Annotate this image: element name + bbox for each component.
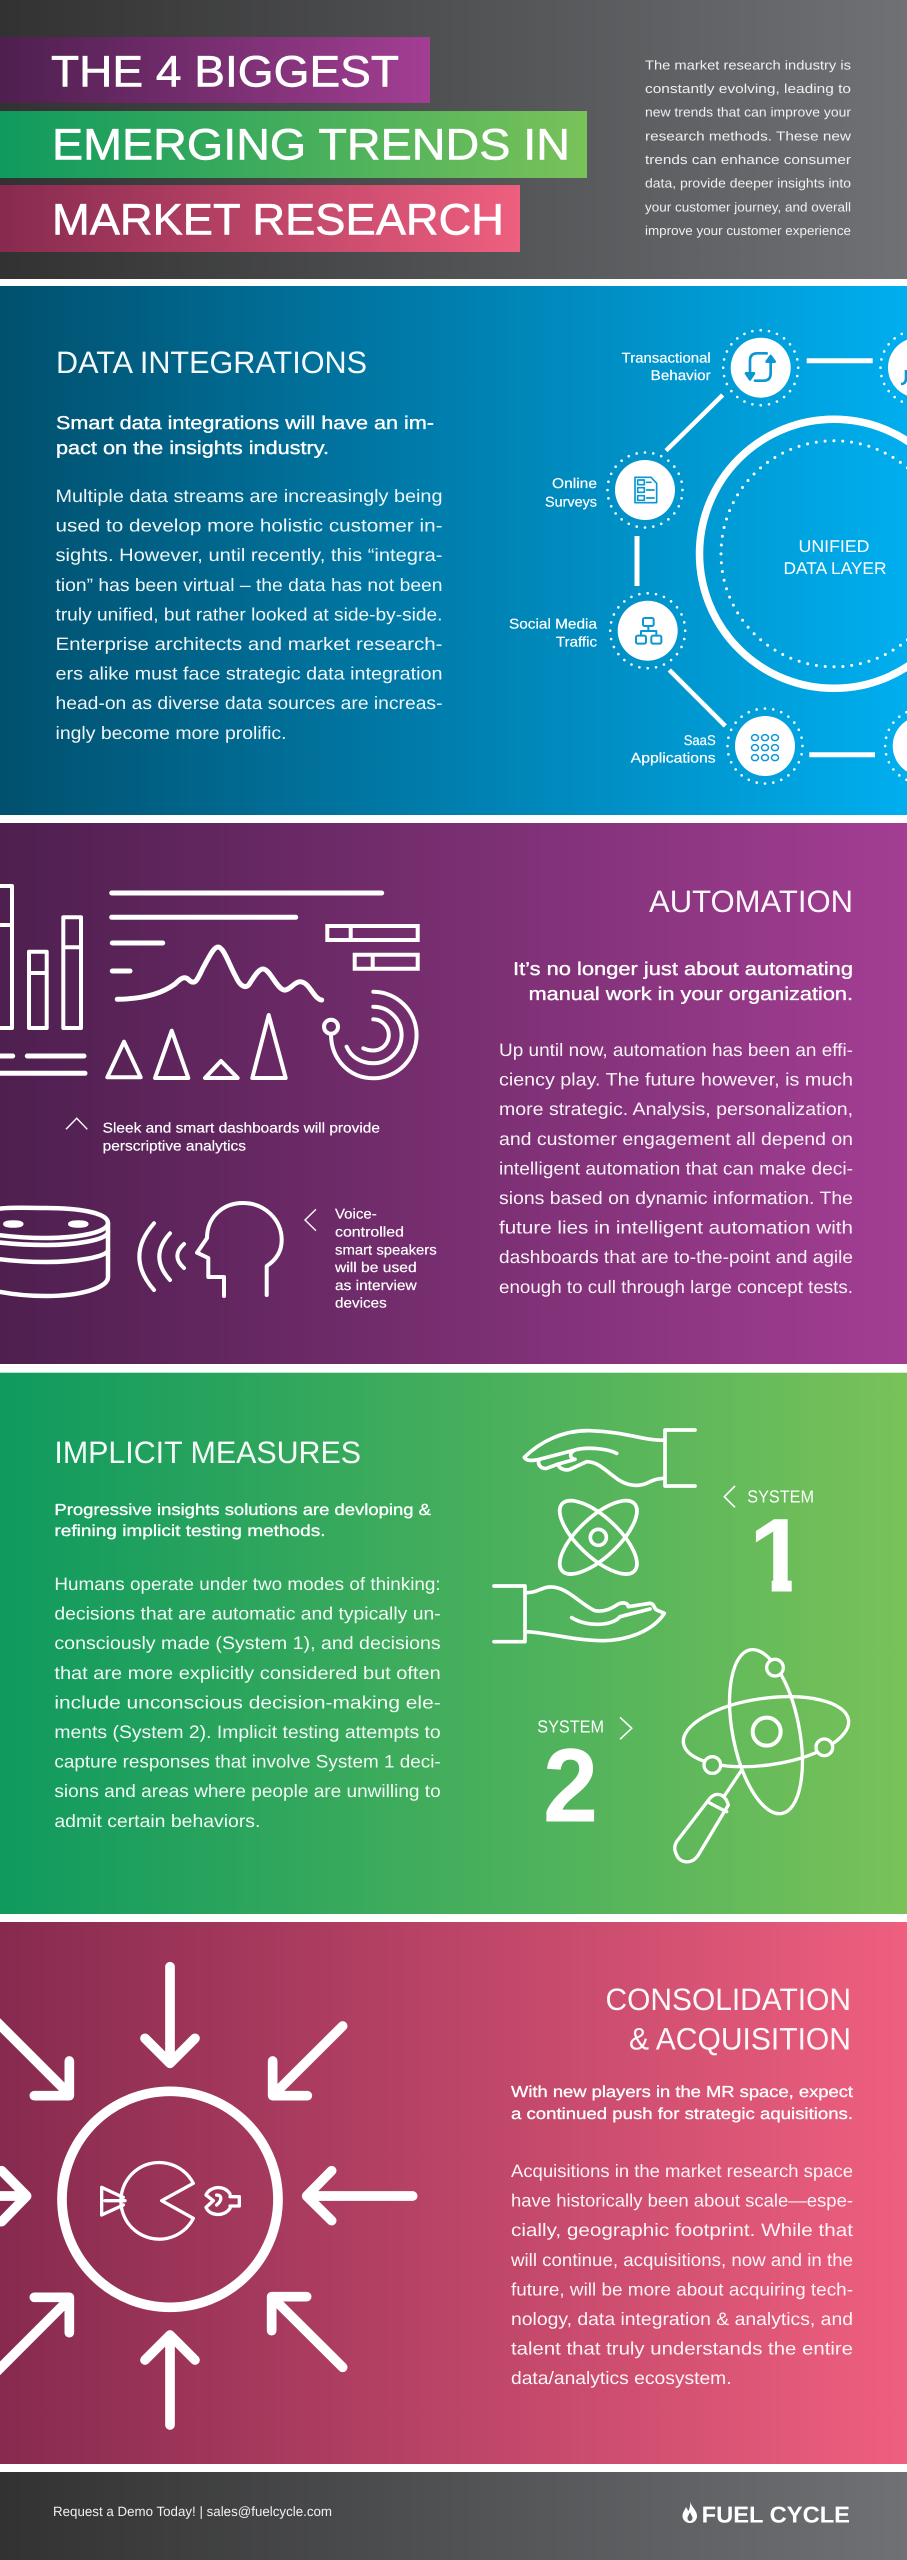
body text: consolidation: talent that truly understands the entire [511,2339,853,2359]
node: saas applications [631,708,802,784]
central circle: UNIFIED [798,537,870,556]
node: social media traffic: Traffic [556,634,597,650]
label: system 1: 1 [749,1498,807,1615]
body text: consolidation: data/analytics ecosystem. [511,2368,732,2388]
body text: automation: Up until now, automation has been an effi- [499,1040,853,1060]
connector lines [637,361,875,755]
subheading: data integrations: Smart data integrations will have an im- [56,412,434,433]
body text: data integrations [56,486,443,743]
diagram: unified data layer [509,330,907,784]
subheading: consolidation: With new players in the MR space, expect [511,2084,854,2101]
body text: implicit measures: sions and areas where people are unwilling to [54,1781,441,1801]
caption: dashboards: Sleek and smart dashboards will provide [103,1120,380,1136]
label: system 2: SYSTEM [537,1717,604,1737]
body text: implicit measures: include unconscious decision-making ele- [54,1692,441,1712]
body text: data integrations: sights. However, until recently, this “integra- [56,545,443,565]
subheading: consolidation [511,2084,854,2123]
heading: implicit measures: IMPLICIT MEASURES [54,1435,361,1470]
node: saas applications: SaaS [684,732,716,748]
body text: automation: ciency play. The future however, is much [499,1070,853,1090]
node: cropped bottom right [885,708,907,784]
panel: implicit measures [0,1373,907,1914]
node: transactional behavior [622,330,798,405]
subheading: consolidation: a continued push for strategic aquisitions. [511,2106,853,2123]
body text: automation [499,1040,853,1297]
subheading: implicit measures: Progressive insights solutions are devloping & [54,1502,431,1519]
intro text: constantly evolving, leading to [645,81,851,96]
body text: automation: more strategic. Analysis, personalization, [499,1099,853,1119]
illustration: speaking head [139,1203,282,1296]
panel: header [0,0,907,279]
intro text: your customer journey, and overall [645,199,851,214]
top hand [524,1430,695,1486]
body text: consolidation: nology, data integration & analytics, and [511,2309,853,2329]
node: transactional behavior: Behavior [651,367,711,383]
intro text [645,57,852,238]
caption: smart speakers: Voice- [335,1205,377,1221]
intro text: trends can enhance consumer [645,152,852,167]
node: cropped top right [880,330,907,405]
label: system 2: 2 [543,1728,598,1845]
subheading: data integrations [56,412,434,458]
body text: consolidation: Acquisitions in the market research space [511,2161,853,2181]
body text: implicit measures: decisions that are automatic and typically un- [54,1604,441,1624]
subheading: automation: manual work in your organization. [529,983,853,1004]
body text: automation: and customer engagement all depend on [499,1129,853,1149]
heading: consolidation and acquisition: & ACQUISITION [629,2022,851,2056]
body text: consolidation: will continue, acquisitions, now and in the [510,2250,853,2270]
heading: consolidation and acquisition [606,1982,851,2056]
horizontal bars [327,926,418,969]
caption: smart speakers [305,1205,437,1311]
central circle [700,419,907,688]
body text: data integrations: ers alike must face strategic data integration [56,664,442,684]
radial gauge [324,992,417,1078]
intro text: The market research industry is [645,57,852,72]
body text: implicit measures: ments (System 2). Implicit testing attempts to [54,1722,441,1742]
bar charts [0,886,85,1073]
intro text: research methods. These new [645,128,852,143]
body text: data integrations: Multiple data streams are increasingly being [56,486,442,506]
intro text: data, provide deeper insights into [645,176,851,191]
body text: implicit measures [54,1574,441,1831]
subheading: implicit measures: refining implicit testing methods. [54,1523,326,1540]
line chart [117,947,322,1000]
body text: consolidation: future, will be more about acquiring tech- [511,2279,853,2299]
illustration: dashboard [0,886,418,1078]
node: online surveys [545,452,682,528]
body text: implicit measures: consciously made (System 1), and decisions [54,1633,441,1653]
caption: dashboards [66,1118,380,1154]
heading: automation: AUTOMATION [649,884,853,919]
body text: data integrations: tion” has been virtual – the data has not been [56,575,443,595]
node: online surveys: Online [552,475,597,491]
body text: data integrations: used to develop more holistic customer in- [56,516,442,536]
heading: consolidation and acquisition: CONSOLIDATION [606,1982,851,2017]
body text: consolidation: cially, geographic footprint. While that [511,2220,853,2240]
caption: smart speakers: controlled [335,1223,404,1239]
label: system 2 [537,1717,632,1845]
illustration: smart speaker [0,1208,108,1296]
logo: fuel cycle: FUEL CYCLE [702,2502,850,2528]
body text: data integrations: truly unified, but rather looked at side-by-side. [56,604,442,624]
body text: automation: sions based on dynamic information. The [499,1188,853,1208]
label: system 1: SYSTEM [747,1486,814,1506]
heading: data integrations: DATA INTEGRATIONS [56,345,367,380]
title: EMERGING TRENDS IN [52,120,570,169]
small atom [549,1489,648,1586]
bottom hand [494,1586,664,1642]
body text: implicit measures: that are more explicitly considered but often [54,1663,441,1683]
text lines [112,893,382,971]
panel: automation [0,823,907,1364]
panel: data integrations [0,286,907,815]
body text: automation: future lies in intelligent automation with [499,1218,853,1238]
triangles [107,1015,286,1078]
subheading: implicit measures [54,1502,431,1540]
body text: automation: intelligent automation that can make deci- [499,1158,853,1178]
subheading: automation: It’s no longer just about automating [513,958,853,979]
body text: consolidation: have historically been about scale—espe- [511,2191,853,2211]
body text: implicit measures: admit certain behaviors. [54,1811,260,1831]
body text: consolidation [510,2161,853,2388]
caption: smart speakers: will be used [334,1259,417,1275]
intro text: improve your customer experience [645,223,851,238]
subheading: automation [513,958,853,1004]
caption: smart speakers: as interview [335,1277,418,1293]
body text: automation: enough to cull through large concept tests. [499,1277,853,1297]
caption: smart speakers: smart speakers [335,1241,437,1257]
body text: implicit measures: Humans operate under two modes of thinking: [54,1574,441,1594]
illustration: converging arrows and big fish [0,1967,413,2425]
call to action: Request a Demo Today! | sales@fuelcycle.com [53,2504,332,2519]
body text: data integrations: head-on as diverse data sources are increas- [56,693,443,713]
caption: smart speakers: devices [335,1295,387,1311]
title [0,37,587,252]
intro text: new trends that can improve your [645,105,852,120]
title: THE 4 BIGGEST [51,47,399,96]
panel: consolidation and acquisition [0,1922,907,2464]
pacman fish [102,2162,239,2239]
node: online surveys: Surveys [545,494,597,510]
illustration: system 2 atom and magnifier [675,1644,853,1862]
node: social media traffic: Social Media [509,616,597,632]
node: saas applications: Applications [631,750,716,766]
body text: data integrations: ingly become more prolific. [56,723,286,743]
central circle [62,2091,278,2307]
title: MARKET RESEARCH [52,195,504,244]
node: transactional behavior: Transactional [622,350,711,366]
panel: footer [0,2472,907,2560]
central circle: DATA LAYER [784,559,886,578]
label: system 1 [723,1485,813,1592]
subheading: data integrations: pact on the insights industry. [56,437,329,458]
node: social media traffic [509,593,685,668]
body text: automation: dashboards that are to-the-point and agile [499,1247,853,1267]
body text: data integrations: Enterprise architects and market research- [56,634,443,654]
body text: implicit measures: capture responses that involve System 1 deci- [54,1752,441,1772]
caption: dashboards: perscriptive analytics [103,1138,246,1154]
arrows [0,1967,413,2425]
illustration: system 1 hands and atom [494,1430,695,1642]
